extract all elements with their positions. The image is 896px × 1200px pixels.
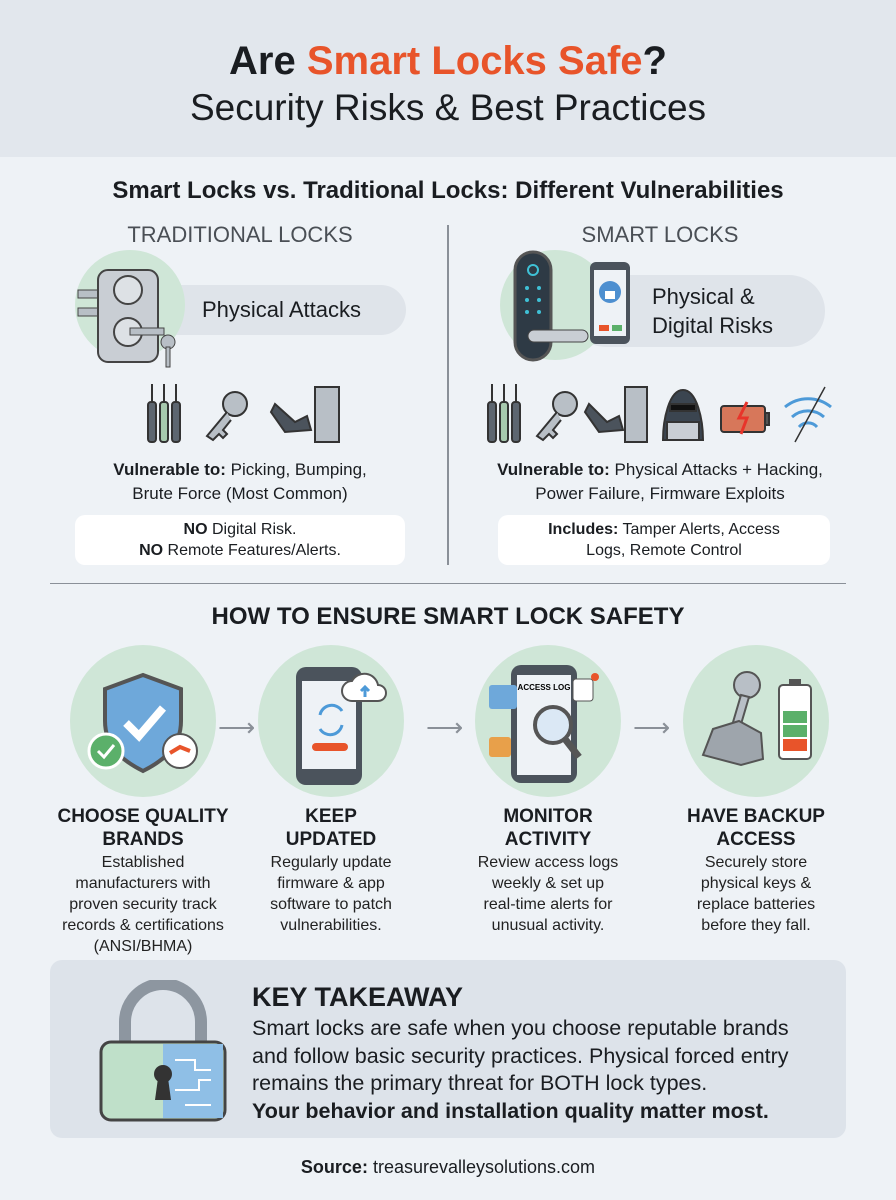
text: vulnerable smart xyxy=(497,460,823,503)
step 2 text: software to patch xyxy=(270,896,392,913)
divider vertical xyxy=(447,225,449,565)
icon: access log: ACCESS LOG xyxy=(518,683,570,692)
icon: shield xyxy=(70,645,216,797)
pill: physical attacks: Physical Attacks xyxy=(202,297,361,322)
heading smart: SMART LOCKS xyxy=(582,222,738,247)
icons: physical + digital threats xyxy=(487,384,832,443)
step 4 text: replace batteries xyxy=(697,896,815,913)
icon: phone update xyxy=(258,645,404,797)
step 4 text xyxy=(697,854,815,934)
step 3 text: real-time alerts for xyxy=(484,896,612,913)
icon: padlock xyxy=(100,980,226,1122)
arrow 1: ⟶ xyxy=(218,712,255,742)
step 1 title: CHOOSE QUALITY BRANDS xyxy=(57,806,228,850)
box: includes features: Logs, Remote Control xyxy=(586,542,742,559)
pill: physical & digital: Digital Risks xyxy=(652,313,773,338)
text: vulnerable smart: Power Failure, Firmware Exploits xyxy=(535,484,785,503)
step 1 text: manufacturers with xyxy=(75,875,211,892)
arrow 2: ⟶ xyxy=(426,712,463,742)
box: no digital risk: NO Remote Features/Alerts. xyxy=(139,542,341,559)
step 2: keep updated xyxy=(258,645,404,934)
step 4 title: HAVE BACKUP ACCESS xyxy=(687,806,825,850)
title: Security Risks & Best Practices xyxy=(190,87,706,128)
step 3 title xyxy=(503,806,593,850)
step 3 text: Review access logs xyxy=(478,854,618,871)
step 4 text: before they fall. xyxy=(701,917,811,934)
step 4 text: Securely store xyxy=(705,854,807,871)
box: no digital risk xyxy=(75,515,405,565)
step 3 title: ACTIVITY xyxy=(505,829,591,850)
arrow 3: ⟶ xyxy=(633,712,670,742)
header band xyxy=(0,0,896,157)
step 1: choose quality brands xyxy=(57,645,228,955)
step 3 text xyxy=(478,854,618,934)
step 2 title xyxy=(286,806,376,850)
text: vulnerable traditional: Brute Force (Most Common) xyxy=(132,484,348,503)
step 3 text: unusual activity. xyxy=(492,917,604,934)
box: includes features: Includes: Tamper Alerts, Access xyxy=(548,521,780,538)
panel: key takeaway xyxy=(50,960,846,1138)
title: Are Smart Locks Safe? xyxy=(229,39,667,83)
takeaway text: Smart locks are safe when you choose reputable brands and follow basic security practices. Physical forced entry remains the primary threat for BOTH lock types. xyxy=(252,1016,789,1095)
step 2 title: UPDATED xyxy=(286,829,376,850)
heading traditional: TRADITIONAL LOCKS xyxy=(127,222,353,247)
step 2 text: vulnerabilities. xyxy=(280,917,382,934)
text: vulnerable smart: Vulnerable to: Physical Attacks + Hacking, xyxy=(497,460,823,479)
text: vulnerable traditional xyxy=(113,460,367,503)
box: includes features xyxy=(498,515,830,565)
takeaway text: Your behavior and installation quality matter most. xyxy=(252,1098,769,1122)
step 2 text xyxy=(270,854,392,934)
step 4 text: physical keys & xyxy=(701,875,811,892)
pill: physical attacks xyxy=(140,285,406,335)
icon: access log xyxy=(475,645,621,797)
pill: physical & digital xyxy=(570,275,825,347)
step 2 text: firmware & app xyxy=(277,875,385,892)
panel: traditional locks xyxy=(75,222,406,565)
icon: traditional lock xyxy=(75,250,185,368)
step 1 text: proven security track xyxy=(69,896,217,913)
divider horizontal xyxy=(50,583,846,584)
step 3 text: weekly & set up xyxy=(492,875,604,892)
icons: physical threats xyxy=(147,384,340,443)
text: vulnerable traditional: Vulnerable to: Picking, Bumping, xyxy=(113,460,367,479)
icon: smart lock and phone xyxy=(500,250,630,362)
step 2 title: KEEP xyxy=(305,806,357,827)
takeaway heading: KEY TAKEAWAY xyxy=(252,982,463,1012)
title xyxy=(190,39,706,128)
step 1 text: Established xyxy=(102,854,184,871)
step 1 text xyxy=(62,854,224,955)
box: no digital risk: NO Digital Risk. xyxy=(184,521,296,538)
section heading: comparison: Smart Locks vs. Traditional Locks: Different Vulnerabilities xyxy=(112,177,784,204)
icon: key rock battery xyxy=(683,645,829,797)
step 1 text: (ANSI/BHMA) xyxy=(94,938,192,955)
section heading: safety: HOW TO ENSURE SMART LOCK SAFETY xyxy=(212,603,684,630)
pill: physical & digital: Physical & xyxy=(652,284,755,309)
step 3 title: MONITOR xyxy=(503,806,593,827)
step 3: monitor activity xyxy=(475,645,621,934)
step 2 text: Regularly update xyxy=(271,854,391,871)
step 1 text: records & certifications xyxy=(62,917,224,934)
source: Source: treasurevalleysolutions.com xyxy=(301,1157,595,1177)
step 4: backup access xyxy=(683,645,829,934)
panel: smart locks xyxy=(487,222,832,565)
